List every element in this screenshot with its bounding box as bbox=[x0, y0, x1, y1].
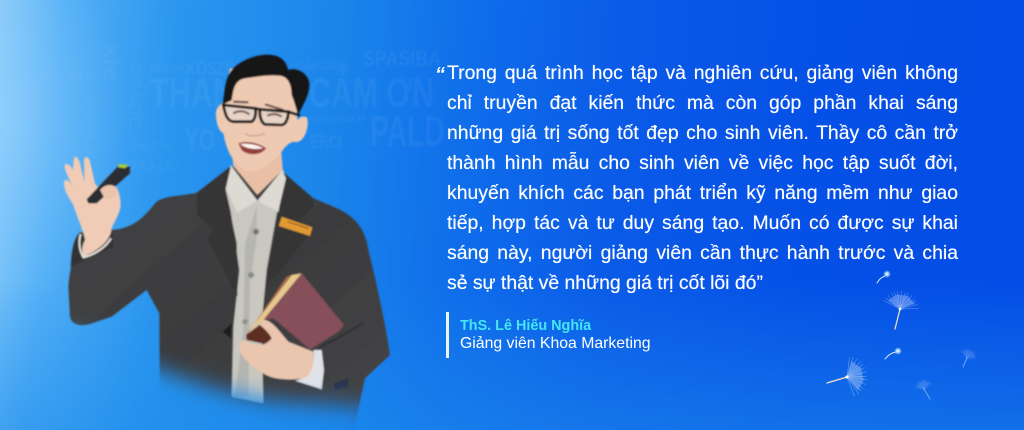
thank-you word cloud watermark: PALD bbox=[370, 107, 445, 156]
jacket bbox=[68, 167, 390, 430]
author block: ThS. Lê Hiếu Nghĩa bbox=[460, 318, 591, 334]
thank-you word cloud watermark: ARIGATOU bbox=[128, 141, 173, 153]
thank-you word cloud watermark: xie bbox=[98, 43, 125, 81]
author accent bar bbox=[446, 312, 448, 358]
portrait: lecturer with presenter remote and book bbox=[62, 54, 391, 430]
head bbox=[216, 55, 309, 171]
thank-you word cloud watermark: GRAZIE bbox=[126, 62, 145, 128]
quote text: Trong quá trình học tập và nghiên cứu, giảng viên không bbox=[447, 62, 958, 84]
sleeve buttons bbox=[333, 378, 348, 390]
thank-you word cloud watermark: KALOHA MA bbox=[42, 70, 100, 82]
author block bbox=[460, 318, 651, 352]
thank-you word cloud watermark: KÖSZÖ bbox=[186, 59, 236, 79]
thank-you word cloud watermark: DAKUJEM bbox=[296, 59, 348, 73]
quote text: thành hình mẫu cho sinh viên về việc học tập suốt đời, bbox=[447, 152, 958, 174]
opening quotation mark: “ bbox=[435, 64, 445, 86]
thank-you word cloud watermark: TASHI DANKAT bbox=[308, 115, 366, 124]
mouth bbox=[238, 142, 266, 154]
collars bbox=[225, 165, 287, 213]
faint seed right bbox=[958, 345, 980, 367]
seed top bbox=[883, 289, 920, 329]
shirt placket bbox=[235, 207, 257, 397]
author block: Giảng viên Khoa Marketing bbox=[460, 335, 651, 352]
quote text: những giá trị sống tốt đẹp cho sinh viên. Thầy cô cần trở bbox=[447, 122, 958, 144]
name badge bbox=[279, 217, 312, 236]
eyebrows bbox=[233, 102, 283, 110]
buttons bbox=[253, 229, 259, 235]
thank-you word cloud watermark: ERCI bbox=[310, 132, 342, 152]
big seed bbox=[827, 354, 871, 397]
quote text: chỉ truyền đạt kiến thức mà còn góp phần khai sáng bbox=[447, 92, 958, 114]
nose bbox=[245, 133, 265, 136]
faint seed lower bbox=[912, 377, 934, 399]
glasses bbox=[223, 105, 288, 125]
book and holding hand bbox=[239, 273, 344, 389]
glow seed two bbox=[885, 347, 902, 359]
thank-you word cloud watermark: SPASIBA bbox=[363, 46, 441, 71]
thank-you word cloud watermark: THAN bbox=[150, 69, 235, 116]
lapels bbox=[197, 167, 237, 297]
quote text: tiếp, hợp tác và tư duy sáng tạo. Muốn có được sự khai bbox=[447, 212, 958, 234]
thank-you word cloud watermark: GRADO bbox=[125, 159, 180, 173]
eyes bbox=[233, 111, 282, 117]
raised hand, remote and cuff bbox=[64, 157, 130, 267]
quote text bbox=[446, 62, 958, 294]
quote text: khuyến khích các bạn phát triển kỹ năng mềm như giao bbox=[447, 182, 958, 204]
thank-you word cloud watermark: DIOLCH bbox=[150, 64, 184, 75]
thank-you word cloud watermark: YO bbox=[185, 124, 215, 157]
thank-you word cloud watermark: CẢM ƠN bbox=[309, 68, 434, 116]
quote text: sẻ sự thật về những giá trị cốt lõi đó” bbox=[447, 272, 763, 294]
hair bbox=[223, 55, 309, 115]
thank-you word cloud watermark: MAHALO bbox=[83, 95, 98, 155]
quote text: sáng này, người giảng viên cần thực hành trước và chia bbox=[447, 242, 958, 264]
glow seed one bbox=[877, 270, 891, 283]
sleeve fold bbox=[320, 323, 363, 347]
shirt bbox=[224, 188, 278, 404]
neck bbox=[231, 143, 283, 195]
